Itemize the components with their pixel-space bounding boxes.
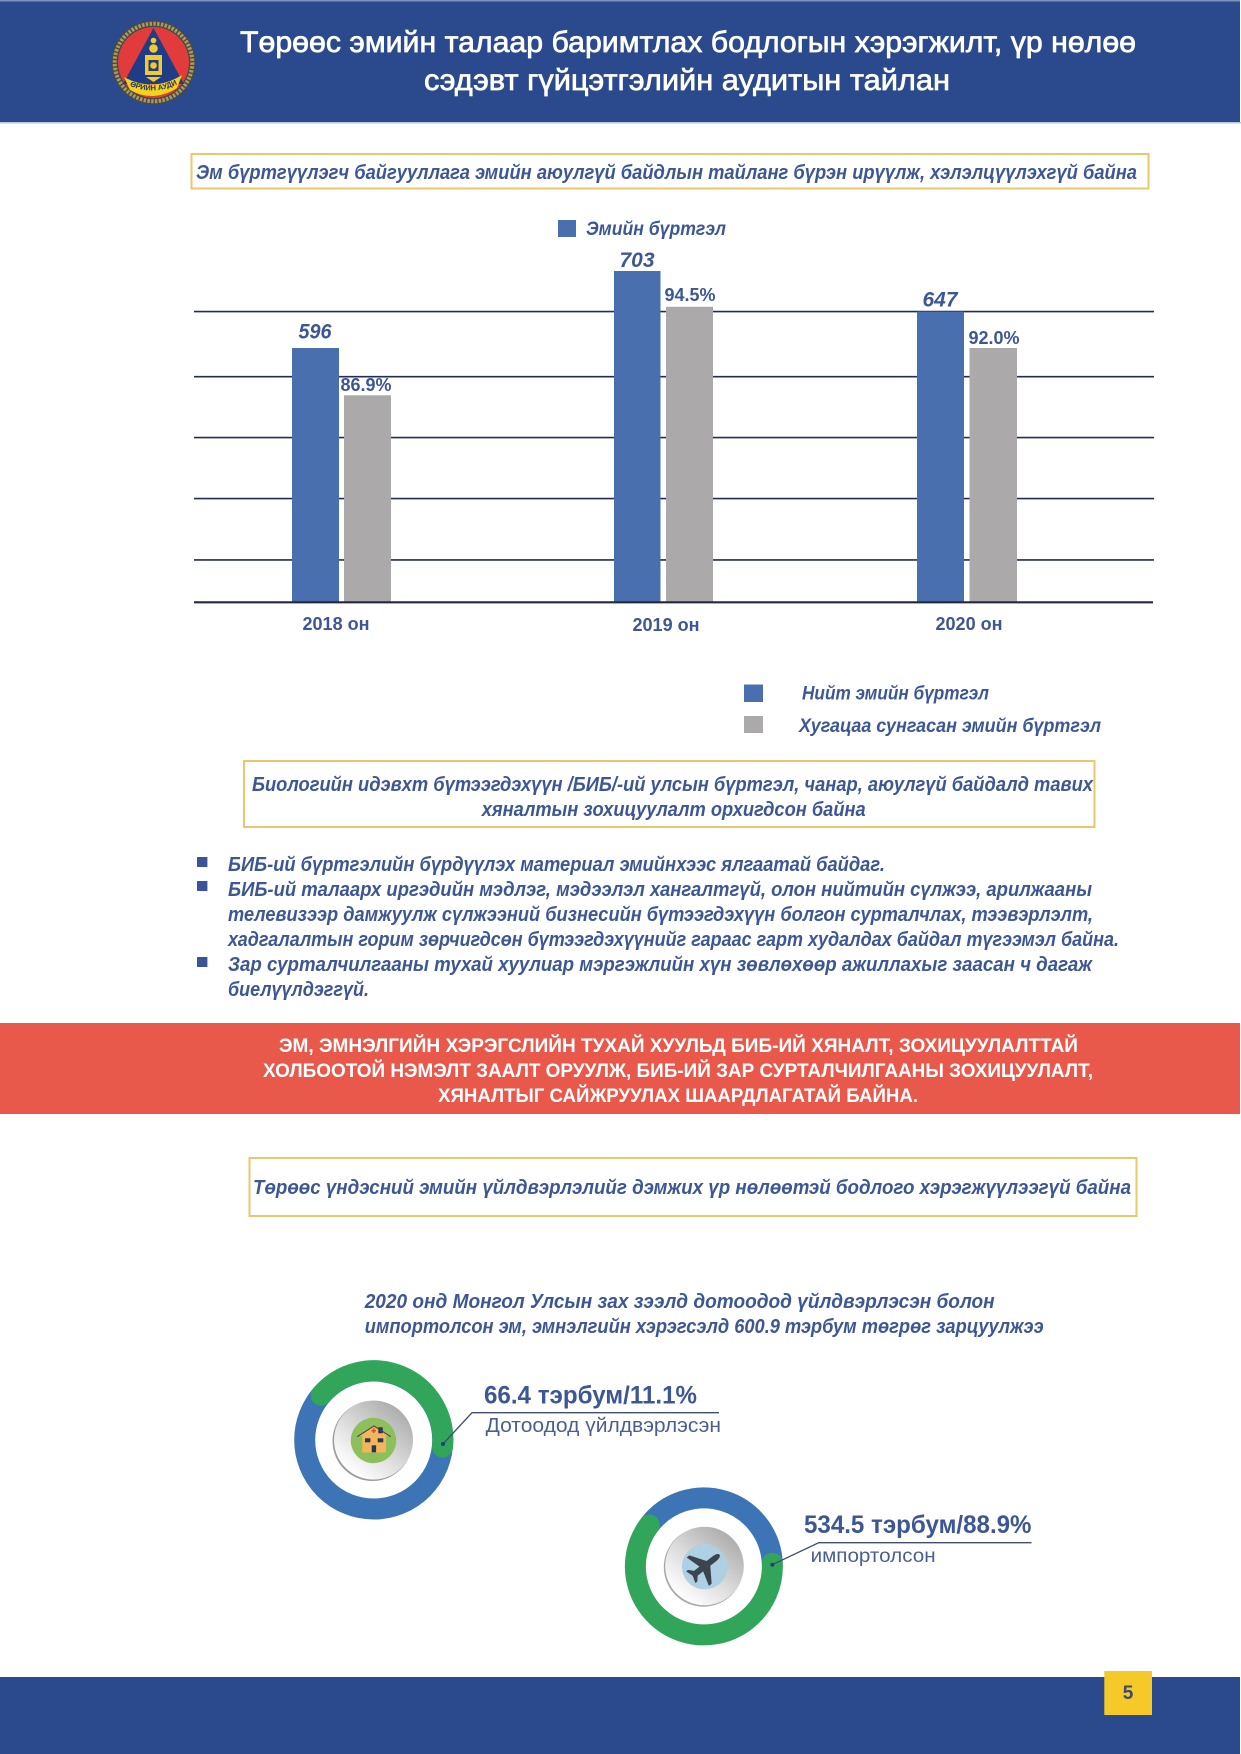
title: сэдэвт гүйцэтгэлийн аудитын тайлан bbox=[424, 64, 950, 97]
callout: imported value: 534.5 тэрбум/88.9% bbox=[804, 1511, 1032, 1539]
bullet list: БИБ-ий бүртгэлийн бүрдүүлэх материал эмийнхээс ялгаатай байдаг. bbox=[228, 854, 885, 876]
red recommendation banner: ХОЛБООТОЙ НЭМЭЛТ ЗААЛТ ОРУУЛЖ, БИБ-ИЙ ЗАР СУРТАЛЧИЛГААНЫ ЗОХИЦУУЛАЛТ, bbox=[263, 1058, 1093, 1082]
bars: 2018 bbox=[292, 320, 392, 602]
header band bbox=[0, 0, 1241, 124]
icon: airplane bbox=[680, 1541, 731, 1591]
callout: domestic value: Дотоодод үйлдвэрлэсэн bbox=[486, 1415, 721, 1437]
bullet list: биелүүлдэггүй. bbox=[228, 979, 369, 1001]
donut: imported bbox=[635, 1498, 772, 1635]
icon: audit emblem bbox=[112, 20, 196, 104]
bullet list: телевизээр дамжуулж сүлжээний бизнесийн бүтээгдэхүүн болгон сурталчлах, тээвэрлэлт, bbox=[228, 904, 1093, 926]
bars: 2020 bbox=[917, 288, 1020, 602]
axis labels: 2020 он bbox=[936, 613, 1002, 634]
footer band bbox=[0, 1671, 1240, 1754]
plate bbox=[664, 1527, 744, 1607]
callout heading: drug safety reports: Эм бүртгүүлэгч байгууллага эмийн аюулгүй байдлын тайланг бүрэн ирүүлж, хэлэлцүүлэхгүй байна bbox=[196, 161, 1137, 184]
bar chart: drug registrations bbox=[194, 219, 1154, 737]
spending intro text bbox=[364, 1291, 1044, 1338]
donut: domestic production bbox=[305, 1371, 443, 1509]
spending intro text: 2020 онд Монгол Улсын зах зээлд дотоодод үйлдвэрлэсэн болон bbox=[364, 1291, 995, 1313]
bars: 2020: 92.0% bbox=[968, 328, 1020, 348]
title bbox=[240, 26, 1136, 97]
spending intro text: импортолсон эм, эмнэлгийн хэрэгсэлд 600.9 тэрбум төгрөг зарцуулжээ bbox=[365, 1316, 1044, 1338]
axis labels: 2018 он bbox=[302, 613, 370, 634]
bars: 2018: 86.9% bbox=[340, 375, 392, 395]
red recommendation banner bbox=[0, 1023, 1240, 1114]
callout: imported value bbox=[770, 1511, 1032, 1567]
bars: 2018: 596 bbox=[298, 320, 332, 344]
bullet list: хадгалалтын горим зөрчигдсөн бүтээгдэхүүнийг гараас гарт худалдах байдал түгээмэл байна. bbox=[227, 929, 1119, 951]
page number: 5 bbox=[1123, 1683, 1134, 1704]
plate bbox=[332, 1400, 413, 1481]
callout: domestic value: 66.4 тэрбум/11.1% bbox=[484, 1382, 697, 1410]
callout: imported value: импортолсон bbox=[811, 1546, 936, 1567]
bars: 2019: 94.5% bbox=[664, 285, 716, 305]
red recommendation banner: ХЯНАЛТЫГ САЙЖРУУЛАХ ШААРДЛАГАТАЙ БАЙНА. bbox=[438, 1083, 918, 1107]
bullet list: Зар сурталчилгааны тухай хуулиар мэргэжлийн хүн зөвлөхөөр ажиллахыг заасан ч дагаж bbox=[228, 954, 1093, 976]
red recommendation banner: ЭМ, ЭМНЭЛГИЙН ХЭРЭГСЛИЙН ТУХАЙ ХУУЛЬД БИБ-ИЙ ХЯНАЛТ, ЗОХИЦУУЛАЛТТАЙ bbox=[279, 1033, 1078, 1057]
page number bbox=[1104, 1671, 1152, 1715]
axis labels: 2019 он bbox=[632, 614, 700, 635]
title: Төрөөс эмийн талаар баримтлах бодлогын хэрэгжилт, үр нөлөө bbox=[240, 26, 1136, 59]
bars: 2019: 703 bbox=[620, 249, 655, 272]
callout heading: domestic production policy bbox=[250, 1158, 1136, 1216]
callout heading: biologically active products: Биологийн идэвхт бүтээгдэхүүн /БИБ/-ий улсын бүртгэл, чанар, аюулгүй байдалд тавих bbox=[252, 774, 1094, 796]
axis labels bbox=[302, 613, 1002, 635]
callout heading: domestic production policy: Төрөөс үндэсний эмийн үйлдвэрлэлийг дэмжих үр нөлөөтэй бодлого хэрэгжүүлээгүй байна bbox=[253, 1177, 1131, 1199]
legend bbox=[744, 682, 1101, 737]
bars: 2019 bbox=[614, 249, 716, 602]
icon: hospital house bbox=[351, 1418, 396, 1463]
bullet list bbox=[197, 854, 1119, 1001]
callout heading: biologically active products bbox=[244, 761, 1094, 827]
callout heading: drug safety reports bbox=[192, 154, 1148, 188]
chart title: Эмийн бүртгэл bbox=[586, 219, 726, 240]
callout heading: biologically active products: хяналтын зохицуулалт орхигдсон байна bbox=[481, 799, 866, 821]
legend: Нийт эмийн бүртгэл bbox=[802, 682, 989, 704]
bullet list: БИБ-ий талаарх иргэдийн мэдлэг, мэдээлэл хангалтгүй, олон нийтийн сүлжээ, арилжааны bbox=[228, 879, 1092, 901]
callout: domestic value bbox=[441, 1382, 721, 1446]
legend: Хугацаа сунгасан эмийн бүртгэл bbox=[798, 715, 1101, 737]
bars: 2020: 647 bbox=[922, 288, 959, 312]
